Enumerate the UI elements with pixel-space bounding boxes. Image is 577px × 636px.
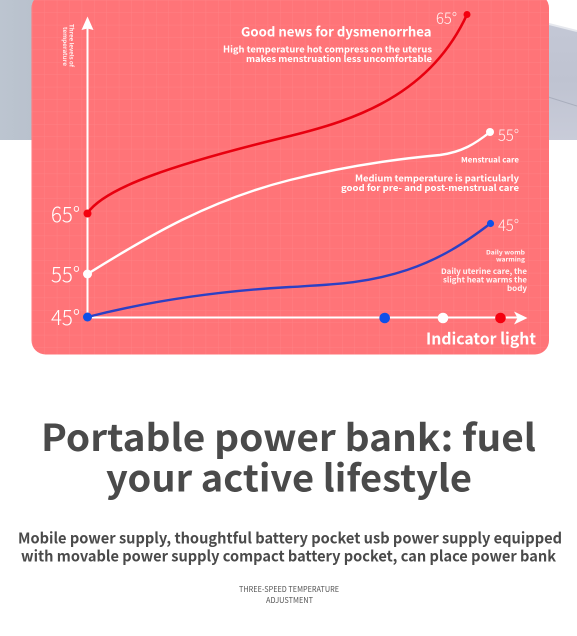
temperature labels, left: 45° [51,302,80,332]
heading: Portable power bank: fuel [41,408,536,462]
heading: your active lifestyle [106,448,472,502]
temperature label 65: 65° [436,5,457,29]
vertical axis label: temperature [61,27,69,66]
product photo backdrop: right [540,21,577,140]
temperature label 55: 55° [498,122,519,146]
temperature labels, left: 65° [51,199,80,229]
callout: low temperature: slight heat warms the [443,274,528,286]
callout: medium temperature [341,154,520,194]
callout: low temperature: warming [496,254,525,264]
description text: with movable power supply compact battery pocket, can place power bank [21,546,556,566]
callout: high temperature: High temperature hot compress on the uterus [223,42,433,56]
temperature labels, left: 55° [51,259,80,289]
heading [41,408,536,502]
description text: Mobile power supply, thoughtful battery pocket usb power supply equipped [18,528,562,548]
callout: high temperature [223,22,433,65]
caption: ADJUSTMENT [266,595,313,606]
caption: THREE-SPEED TEMPERATURE [239,584,339,595]
panel: temperature chart [32,0,549,354]
medium temperature curve [83,128,494,278]
temperature labels, left [51,199,80,332]
callout: medium temperature: Medium temperature is particularly [355,172,520,184]
temperature label 45: 45° [498,212,519,236]
callout: low temperature: Daily uterine care, the [441,266,528,277]
callout: low temperature: body [507,283,528,294]
caption [239,584,339,606]
vertical axis arrow [82,16,94,317]
callout: low temperature: Daily womb [486,248,525,256]
description text [18,528,562,566]
callout: low temperature [441,248,528,294]
callout: medium temperature: Menstrual care [461,154,520,166]
callout: high temperature: makes menstruation less uncomfortable [246,52,432,65]
callout: high temperature: Good news for dysmenorrhea [241,22,432,40]
indicator light dots [379,313,506,323]
vertical axis label: Three levels of [68,24,76,68]
horizontal axis arrow [87,312,528,324]
product photo backdrop: left [0,0,40,140]
horizontal axis label: Indicator light [426,326,536,350]
high temperature curve [84,11,470,218]
callout: medium temperature: good for pre- and post-menstrual care [341,181,519,194]
low temperature curve [83,220,494,322]
vertical axis label [61,24,76,68]
